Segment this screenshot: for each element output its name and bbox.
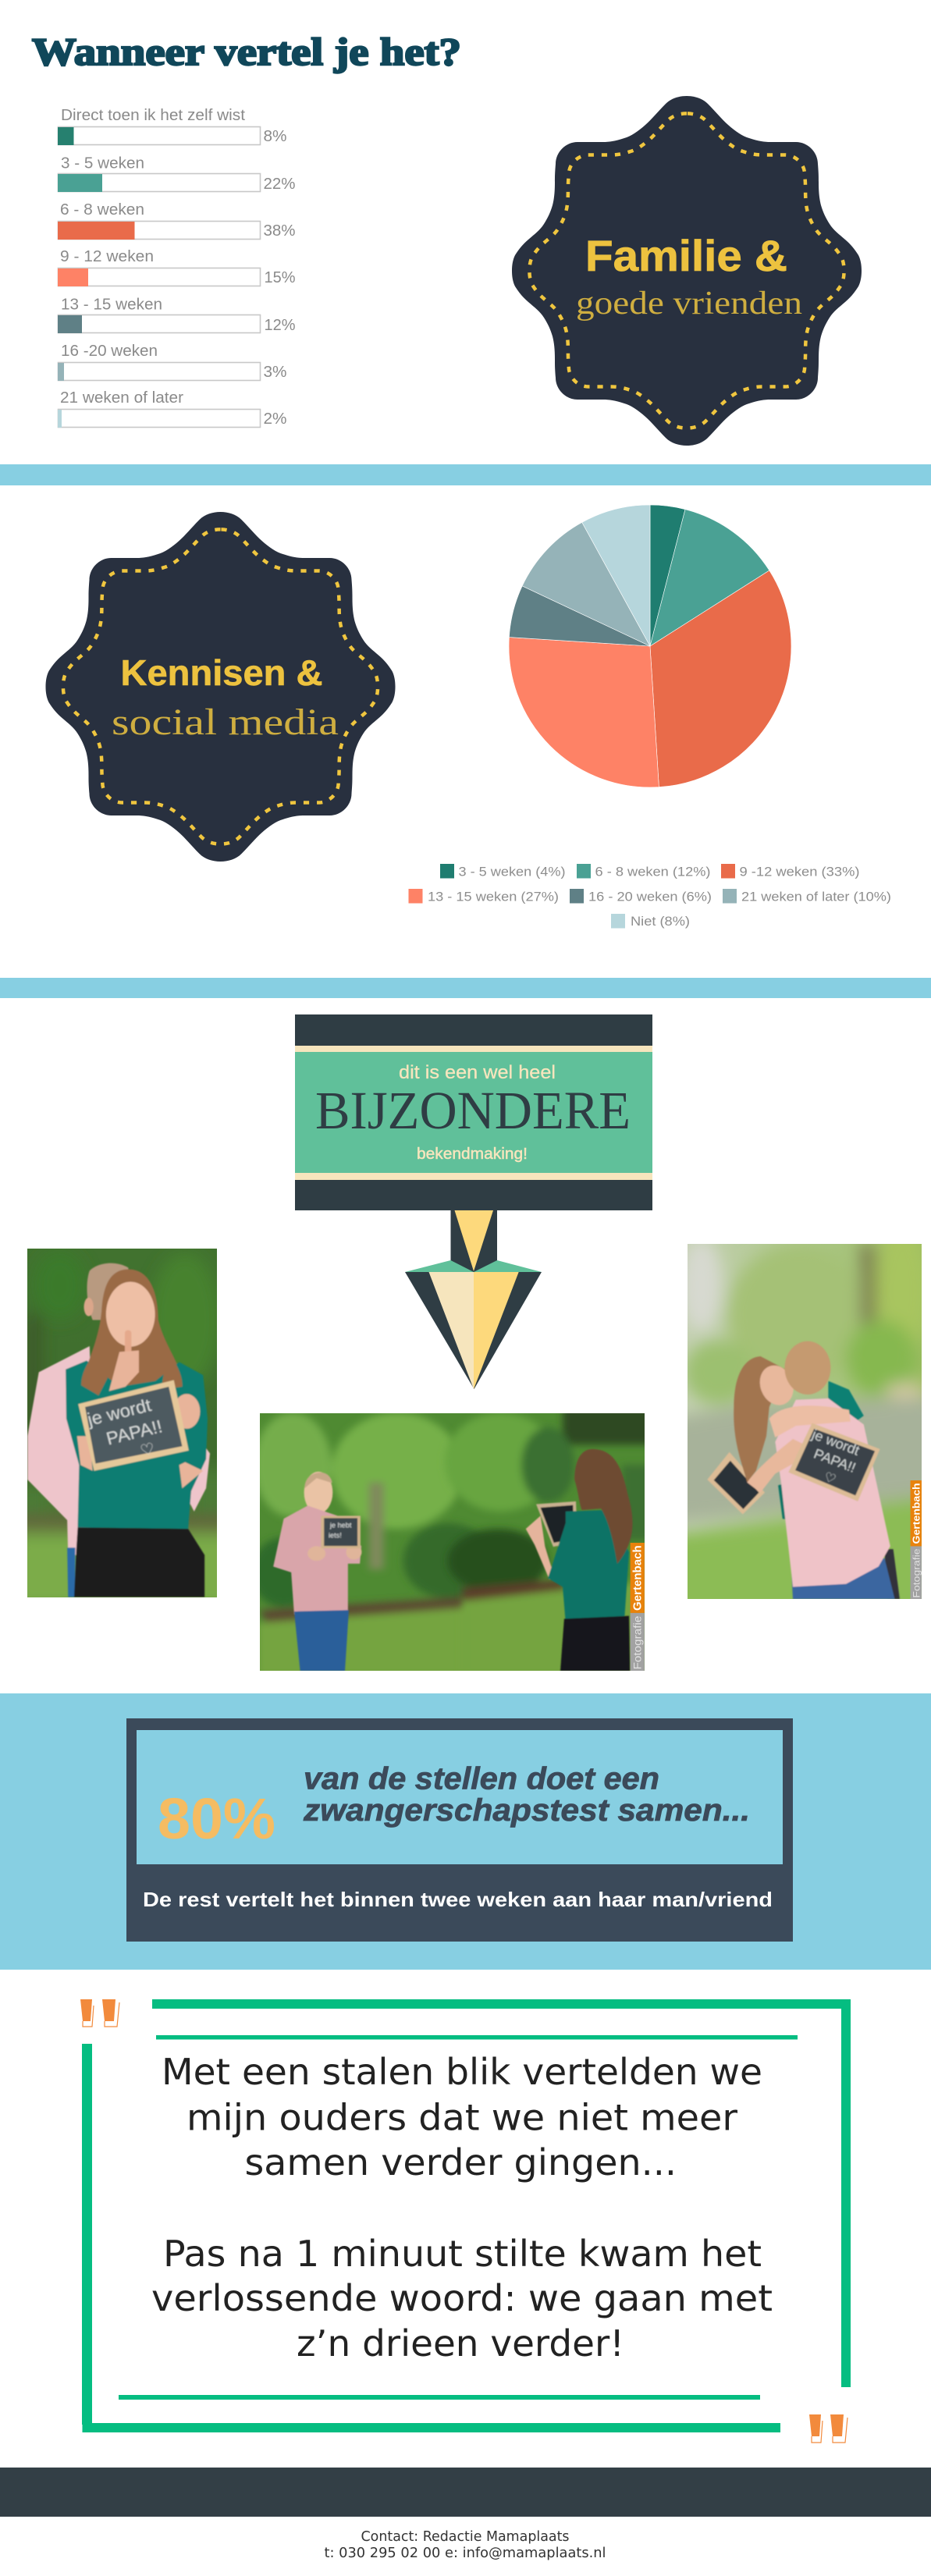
band: divider 1 bbox=[0, 464, 931, 485]
bar: 3-5 weken bbox=[58, 155, 296, 193]
photo: woman with chalkboard bbox=[27, 1249, 217, 1597]
panel: 80 percent statistic: van de stellen doet een bbox=[304, 1762, 659, 1796]
panel: 80 percent statistic: zwangerschapstest samen... bbox=[303, 1793, 750, 1828]
photo: woman with chalkboard: ♡ bbox=[139, 1441, 157, 1460]
photo: couple hugging: ♡ bbox=[822, 1469, 838, 1487]
sign: bijzondere bekendmaking: bekendmaking! bbox=[417, 1146, 528, 1163]
quote text: verlossende woord: we gaan met bbox=[151, 2277, 773, 2319]
pie legend: 9 -12 weken (33%) bbox=[740, 865, 860, 879]
bar: 21 weken of later bbox=[58, 389, 287, 428]
bar: 21 weken of later: 21 weken of later bbox=[60, 389, 183, 407]
badge: familie en goede vrienden: Familie & bbox=[585, 231, 787, 280]
pie legend: 21 weken of later (10%) bbox=[741, 890, 891, 904]
bar: 13-15 weken bbox=[58, 297, 296, 334]
photo credit: photo 2: Fotografie bbox=[632, 1616, 644, 1669]
bar: 21 weken of later: 2% bbox=[264, 410, 287, 428]
badge: familie en goede vrienden bbox=[512, 96, 862, 446]
quote text: Met een stalen blik vertelden we bbox=[162, 2051, 762, 2093]
arrow pointing down bbox=[405, 1210, 542, 1389]
pie chart bbox=[509, 505, 791, 787]
bar: 6-8 weken bbox=[58, 201, 296, 240]
bar: 3-5 weken: 22% bbox=[264, 176, 296, 193]
bar: 13-15 weken: 12% bbox=[264, 317, 296, 334]
photo: man and woman facing each other: iets! bbox=[329, 1531, 342, 1539]
quote text: Pas na 1 minuut stilte kwam het bbox=[163, 2233, 762, 2275]
panel: 80 percent statistic: De rest vertelt het binnen twee weken aan haar man/vriend bbox=[143, 1888, 773, 1911]
bar: 9-12 weken bbox=[58, 248, 296, 286]
quote text: mijn ouders dat we niet meer bbox=[187, 2096, 737, 2138]
contact text bbox=[325, 2528, 606, 2561]
pie legend: 13 - 15 weken (27%) bbox=[428, 890, 559, 904]
contact text: Contact: Redactie Mamaplaats bbox=[361, 2528, 570, 2545]
badge: kennisen en social media: Kennisen & bbox=[120, 652, 323, 693]
sign: bijzondere bekendmaking bbox=[295, 1014, 652, 1210]
bar chart: when do you tell bbox=[58, 107, 296, 428]
pie legend: 16 - 20 weken (6%) bbox=[588, 890, 712, 904]
band: divider 2 bbox=[0, 978, 931, 998]
photo credit: photo 3: Gertenbach bbox=[911, 1483, 922, 1544]
pie legend: Niet (8%) bbox=[631, 914, 690, 929]
quote frame bbox=[82, 1999, 851, 2432]
icon: closing quote mark bbox=[809, 2414, 847, 2443]
badge: familie en goede vrienden: goede vrienden bbox=[576, 286, 802, 322]
photo credit: photo 3 bbox=[911, 1480, 922, 1599]
bar: 16-20 weken bbox=[58, 343, 287, 381]
sign: bijzondere bekendmaking: dit is een wel heel bbox=[399, 1062, 556, 1083]
quote text: samen verder gingen... bbox=[245, 2141, 677, 2183]
quote text bbox=[151, 2051, 773, 2365]
photo: man and woman facing each other: je hebt bbox=[329, 1521, 352, 1529]
title: Wanneer vertel je het? bbox=[32, 30, 461, 73]
photo: woman with chalkboard: PAPA!! bbox=[105, 1416, 165, 1449]
bar: 6-8 weken: 6 - 8 weken bbox=[60, 201, 144, 219]
icon: opening quote mark bbox=[80, 1999, 119, 2027]
bar: 9-12 weken: 15% bbox=[264, 269, 296, 286]
photo: couple hugging bbox=[688, 1244, 922, 1599]
bar: 3-5 weken: 3 - 5 weken bbox=[61, 155, 144, 172]
footer band bbox=[0, 2468, 931, 2517]
bar: 6-8 weken: 38% bbox=[264, 222, 296, 240]
bar: 16-20 weken: 3% bbox=[264, 364, 287, 381]
pie legend: 6 - 8 weken (12%) bbox=[595, 865, 710, 879]
pie legend bbox=[409, 864, 891, 929]
panel: 80 percent statistic bbox=[0, 1693, 931, 1970]
quote text: z’n drieen verder! bbox=[297, 2322, 624, 2365]
photo: woman with chalkboard: je wordt bbox=[84, 1395, 154, 1430]
bar: direct bbox=[58, 107, 287, 145]
bar: direct: Direct toen ik het zelf wist bbox=[61, 107, 245, 124]
pie legend: 3 - 5 weken (4%) bbox=[459, 865, 565, 879]
photo credit: photo 2 bbox=[631, 1543, 645, 1671]
bar: direct: 8% bbox=[264, 128, 287, 145]
photo: man and woman facing each other bbox=[251, 1407, 651, 1677]
badge: kennisen en social media: social media bbox=[112, 702, 339, 743]
photo: couple hugging: PAPA!! bbox=[812, 1446, 858, 1476]
panel: 80 percent statistic: 80% bbox=[158, 1786, 275, 1851]
photo: couple hugging: je wordt bbox=[809, 1427, 862, 1459]
contact text: t: 030 295 02 00 e: info@mamaplaats.nl bbox=[325, 2545, 606, 2561]
bar: 9-12 weken: 9 - 12 weken bbox=[60, 248, 154, 265]
badge: kennisen en social media bbox=[45, 512, 395, 862]
bar: 13-15 weken: 13 - 15 weken bbox=[61, 297, 162, 314]
bar: 16-20 weken: 16 -20 weken bbox=[61, 343, 158, 360]
photo credit: photo 3: Fotografie bbox=[911, 1548, 922, 1598]
sign: bijzondere bekendmaking: BIJZONDERE bbox=[315, 1081, 631, 1140]
photo credit: photo 2: Gertenbach bbox=[631, 1545, 645, 1611]
